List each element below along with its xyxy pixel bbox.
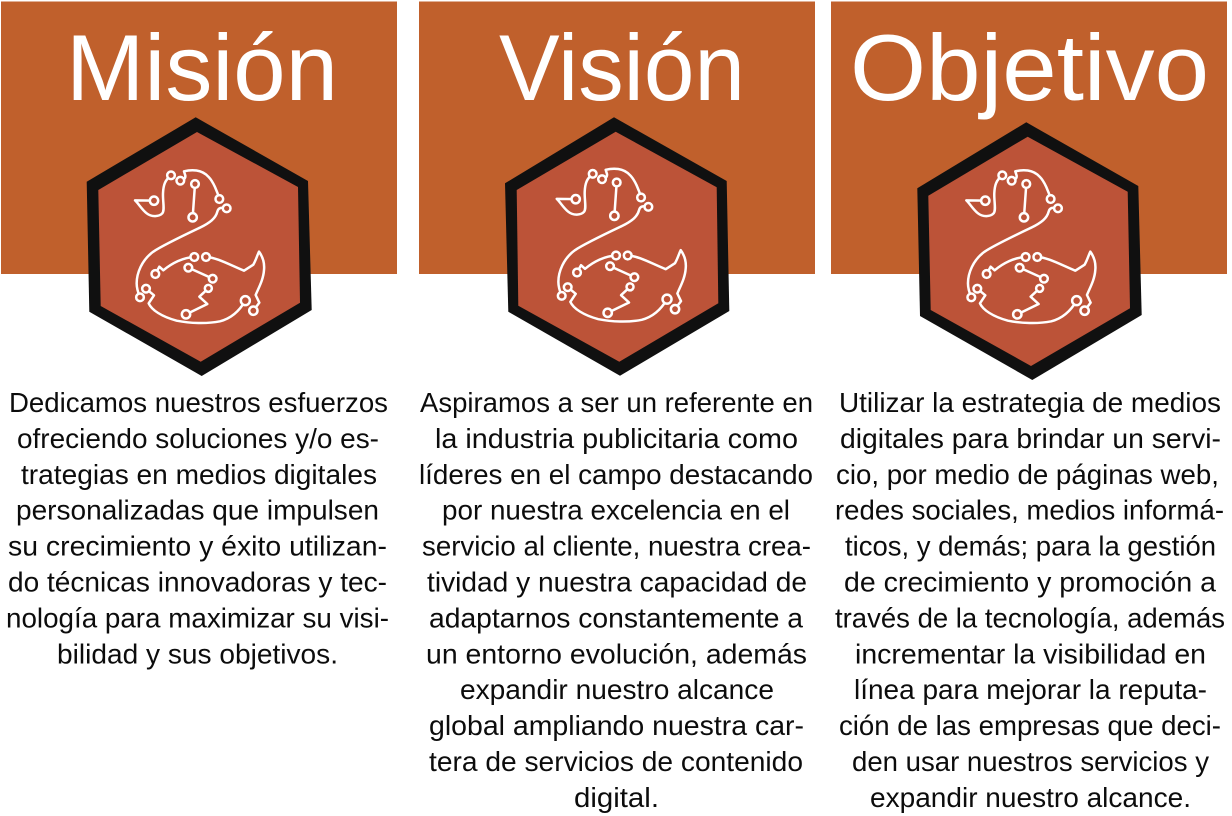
banner: Visión xyxy=(419,2,815,274)
text block: Objetivo description: línea para mejorar la reputa- xyxy=(854,674,1207,705)
text block: Visión description xyxy=(419,387,813,813)
title: Misión: Misión xyxy=(66,15,338,120)
text block: Objetivo description: den usar nuestros servicios y xyxy=(852,746,1209,777)
text block: Objetivo description: ción de las empresas que deci- xyxy=(839,710,1221,741)
text block: Visión description: la industria publicitaria como xyxy=(435,423,798,454)
text block: Objetivo description: incrementar la visibilidad en xyxy=(855,638,1206,669)
text block: Objetivo description xyxy=(835,387,1225,813)
panel: Visión xyxy=(419,2,815,813)
text block: Objetivo description: través de la tecnología, además xyxy=(835,602,1225,633)
text block: Objetivo description: redes sociales, medios informá- xyxy=(835,495,1224,526)
icon: hexagon with circuit duck xyxy=(87,117,312,376)
text block: Visión description: por nuestra excelencia en el xyxy=(442,495,790,526)
icon: hexagon with circuit duck xyxy=(505,117,729,376)
text block: Visión description: líderes en el campo destacando xyxy=(419,459,813,490)
text block: Misión description: bilidad y sus objetivos. xyxy=(57,638,338,669)
text block: Objetivo description: de crecimiento y promoción a xyxy=(844,566,1217,598)
text block: Visión description: expandir nuestro alcance xyxy=(460,674,774,705)
text block: Objetivo description: Utilizar la estrategia de medios xyxy=(839,387,1221,418)
text block: Visión description: servicio al cliente, nuestra crea- xyxy=(422,531,811,562)
text block: Visión description: tera de servicios de contenido xyxy=(429,746,803,777)
panel: Objetivo xyxy=(831,2,1227,813)
text block: Objetivo description: ticos, y demás; para la gestión xyxy=(845,531,1216,562)
text block: Visión description: global ampliando nuestra car- xyxy=(429,710,804,741)
title: Visión: Visión xyxy=(499,15,745,120)
text block: Misión description: personalizadas que impulsen xyxy=(16,495,379,526)
text block: Misión description: su crecimiento y éxito utilizan- xyxy=(8,531,387,562)
text block: Objetivo description: digitales para brindar un servi- xyxy=(840,423,1221,454)
icon: hexagon with circuit duck xyxy=(917,122,1142,380)
text block: Misión description: Dedicamos nuestros esfuerzos xyxy=(9,387,388,418)
text block: Visión description: adaptarnos constantemente a xyxy=(429,602,804,633)
text block: Misión description: nología para maximizar su visi- xyxy=(6,602,389,633)
text block: Misión description: trategias en medios digitales xyxy=(21,459,377,490)
title: Objetivo: Objetivo xyxy=(850,15,1209,120)
text block: Visión description: Aspiramos a ser un referente en xyxy=(420,387,813,418)
text block: Objetivo description: expandir nuestro alcance. xyxy=(870,782,1191,813)
text block: Misión description: ofreciendo soluciones y/o es- xyxy=(17,423,379,454)
panel: Misión xyxy=(1,2,397,669)
text block: Visión description: un entorno evolución, además xyxy=(426,638,807,669)
text block: Visión description: digital. xyxy=(574,782,659,813)
text block: Misión description: do técnicas innovadoras y tec- xyxy=(8,566,387,598)
banner: Objetivo xyxy=(831,2,1227,274)
text block: Misión description xyxy=(6,387,389,669)
banner: Misión xyxy=(1,2,397,274)
text block: Visión description: tividad y nuestra capacidad de xyxy=(427,566,807,598)
text block: Objetivo description: cio, por medio de páginas web, xyxy=(836,459,1219,490)
